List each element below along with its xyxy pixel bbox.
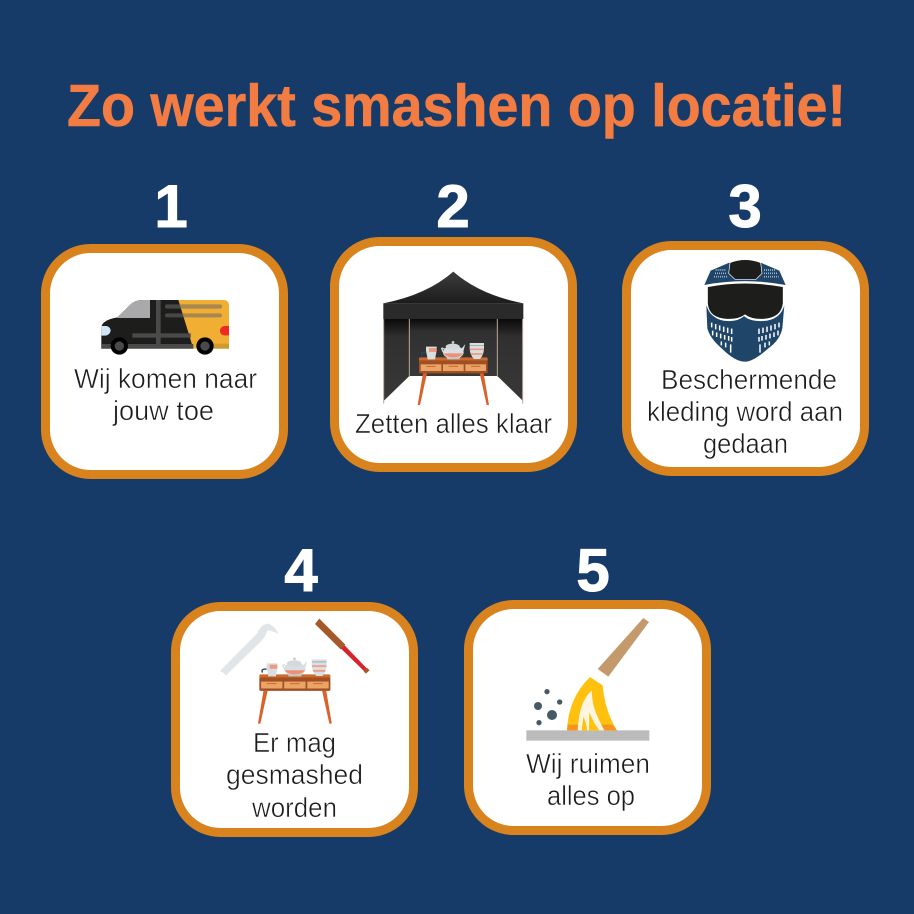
card 5 text [526, 748, 650, 811]
panel: step 4 [176, 537, 414, 832]
step number 4: 4 [284, 537, 318, 604]
card 5 text: alles op [547, 780, 635, 811]
title: Zo werkt smashen op locatie! [67, 73, 846, 139]
card 1 frame [46, 248, 284, 474]
card 4 text: worden [251, 792, 337, 823]
panel: step 3 [626, 173, 864, 472]
card 3 text [647, 364, 843, 459]
icon: broom sweeping [526, 618, 649, 741]
card 5 frame [468, 604, 706, 830]
card 1 text: jouw toe [112, 395, 214, 426]
step number 5: 5 [576, 537, 610, 604]
card 1 text: Wij komen naar [74, 363, 257, 394]
card 5 text: Wij ruimen [526, 748, 650, 779]
icon: table with crowbar and bat [220, 619, 370, 724]
step number 1: 1 [154, 173, 188, 240]
card 2 text: Zetten alles klaar [355, 408, 552, 439]
card 4 text: Er mag [253, 727, 336, 758]
card 3 frame [626, 246, 864, 472]
card 3 text: Beschermende [661, 364, 837, 395]
card 3 text: gedaan [703, 428, 788, 459]
card 4 text [226, 727, 363, 823]
step number 3: 3 [728, 173, 762, 240]
card 4 frame [176, 606, 414, 832]
panel: step 1 [46, 173, 284, 474]
card 2 frame [334, 242, 572, 468]
icon: protective mask [704, 260, 786, 362]
icon: van [101, 300, 229, 355]
card 3 text: kleding word aan [647, 396, 843, 427]
panel: step 2 [334, 173, 572, 468]
panel: step 5 [468, 537, 706, 830]
card 1 text [74, 363, 257, 426]
step number 2: 2 [436, 173, 470, 240]
card 4 text: gesmashed [226, 759, 363, 790]
icon: tent with table [383, 272, 523, 405]
